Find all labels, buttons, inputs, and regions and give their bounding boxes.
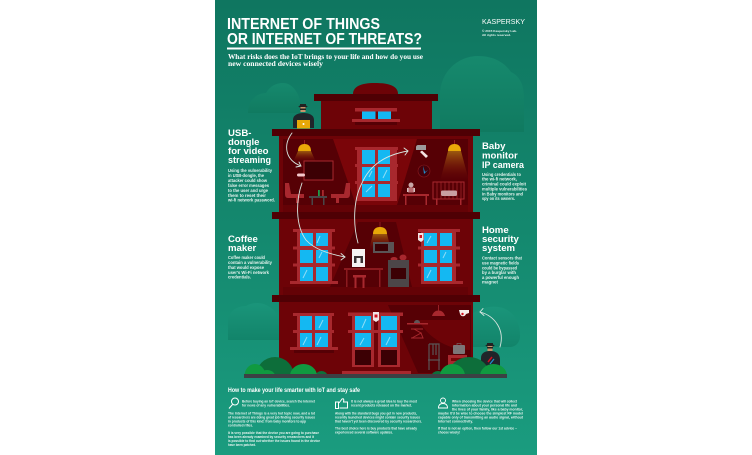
tip 2: experienced several software updates. [335,430,393,434]
logo: Kaspersky: © 2015 Kaspersky Lab. [482,30,517,33]
callout: home security: Home [482,225,509,236]
security camera [459,310,469,316]
callout: USB dongle: USB- [228,128,251,139]
callout: home security [482,225,523,284]
logo: Kaspersky: All rights reserved. [482,34,511,37]
cornice: middle [272,212,480,219]
callout: coffee maker: maker [228,243,257,254]
callout: coffee maker: user's Wi-Fi network [228,270,270,275]
callout: baby monitor: Baby [482,141,506,152]
tip 1: The Internet of Things is a very hot topic now, and a lot [228,412,316,416]
subtitle [228,54,423,68]
arrow: dongle to coffee maker [298,183,345,260]
tip 1 [228,398,320,447]
callout: home security: security [482,234,519,245]
callout: home security: magnet [482,280,499,284]
room: top floor [283,139,468,212]
ground [244,374,507,378]
tip 1: in products of this kind: from baby monitors to app [228,420,306,424]
hacker on the roof [293,104,314,128]
callout: home security: Contact sensors that [482,256,523,260]
callout: coffee maker: credentials. [228,274,251,280]
callout: USB dongle: attacker could show [228,178,268,183]
bushes: left [244,357,327,374]
title: INTERNET OF THINGS [227,16,380,33]
lamp: right [440,140,469,181]
callout: USB dongle: in USB-dongle, the [228,173,265,178]
stove [388,254,409,287]
tip 3: When choosing the device that will collect [452,400,518,404]
callout: baby monitor: spy on its owners. [482,196,515,201]
callout: home security: a powerful enough [482,275,519,280]
window: ground floor [290,313,338,353]
callout: baby monitor: IP camera [482,160,525,171]
tip 3: capable only of transmitting an audio signal, without [438,416,524,420]
tip 2: Along with the standard bugs you get in new products, [335,412,417,416]
room: kitchen [283,222,468,295]
tip 3: information about your personal life and [452,404,517,408]
icon: magnifier [229,398,238,408]
title: OR INTERNET OF THREATS? [227,31,422,48]
bottom heading: How to make your life smarter with IoT and stay safe [228,387,360,394]
wall clock [418,165,430,177]
coffee maker [352,249,365,267]
armchair: right [331,183,350,203]
callout: USB dongle [227,128,275,202]
callout: home security: by a burglar with [482,270,516,275]
building [272,83,480,375]
bushes: right [432,357,507,374]
callout: coffee maker: Coffee maker could [228,255,265,260]
tip 2: that haven't yet been discovered by security researchers. [335,420,422,424]
tip 2: It is not always a great idea to buy the most [351,400,418,404]
double doors [342,312,411,374]
coffee table [309,190,327,205]
callout: USB dongle: streaming [228,155,271,166]
counter and stool [344,268,383,288]
callout: coffee maker [228,234,273,280]
logo: Kaspersky [482,17,525,37]
hat and hanger [407,320,428,338]
icon: person [438,398,448,408]
logo: Kaspersky: KASPERSKY [482,17,525,26]
callout: coffee maker: Coffee [228,234,258,245]
icon: thumbs up [336,399,348,408]
callout: USB dongle: them to reset their [228,193,266,198]
window: top floor [355,147,398,201]
chair [428,344,440,370]
room: garage [388,305,471,373]
callout: coffee maker: contain a vulnerability [228,260,273,265]
dresser and suitcase [448,344,467,372]
arrow: hacker to TV [287,133,301,167]
panel: poster background [215,0,537,455]
callout: USB dongle: Using the vulnerability [228,168,273,173]
lamp: kitchen [369,222,391,250]
tip 3: Internet connectivity. [438,420,473,424]
callout: baby monitor: criminal could exploit [482,182,527,186]
tip 1: is possible to find out whether the issues found in the device [228,439,320,443]
tip 1: have been patched. [228,443,256,447]
tip 1: has been already examined by security researchers and it [228,435,315,439]
window: middle right [418,229,463,284]
callout: baby monitor [482,141,528,201]
tip 2 [335,399,422,434]
callout: home security: use magnetic fields [482,260,520,266]
crib [433,182,464,205]
microwave [373,242,394,253]
toy robot and table [403,182,429,205]
tip 3: maybe it'd be wise to choose the simplest RF model [438,412,523,416]
tip 3: choose wisely! [438,430,460,434]
callout: USB dongle: dongle [228,137,259,148]
tip 1: for news of any vulnerabilities. [242,404,290,408]
callout: USB dongle: for video [228,146,269,157]
roof structure [314,83,438,131]
tip 3 [438,398,524,434]
tip 1: It is very possible that the device you are going to purchase [228,431,319,435]
tip 1: controlled rifles. [228,424,253,428]
tip 2: recently launched devices might contain security issues [335,416,420,420]
tip 1: of researchers are doing great job finding security issues [228,416,315,420]
tip 3: If that is not an option, then follow our 1st advice – [438,426,517,430]
lamp: left [293,140,316,162]
callout: home security: could be bypassed [482,266,517,270]
door sensor: kitchen [418,233,424,242]
arrow: burglar to sensor [480,308,501,347]
tip 1: Before buying an IoT device, search the Internet [242,400,316,404]
walls [279,135,473,375]
TV [304,161,333,180]
callout: home security: system [482,243,515,254]
callout: USB dongle: wi-fi network password. [227,198,275,202]
tip 2: recent products released on the market. [351,404,412,408]
callout: baby monitor: in Baby monitors and [482,192,523,196]
IP camera [416,145,428,158]
door sensor: ground floor [373,312,379,322]
cornice: lower [272,295,480,302]
USB dongle [297,174,305,176]
callout: baby monitor: the wi-fi network, [482,176,517,182]
garage lamp [432,305,445,316]
callout: baby monitor: multiple vulnerabilities [482,186,528,192]
window: middle left [290,229,338,284]
cornice: upper [272,129,480,136]
arrow: coffee maker to camera [355,148,408,243]
callout: USB dongle: false error messages [228,183,270,188]
tip 3: the lives of your family, like a baby monitor, [452,408,523,412]
callout: USB dongle: to the user and urge [228,188,269,193]
subtitle: new connected devices wisely [228,61,324,68]
armchair: left [285,183,304,203]
callout: baby monitor: monitor [482,150,518,162]
title [227,16,422,50]
burglar with magnet [481,343,500,366]
subtitle: What risks does the IoT brings to your life and how do you use [228,54,423,61]
tip 2: The best choice here is buy products that have already [335,426,417,430]
callout: baby monitor: Using credentials to [482,172,521,177]
callout: coffee maker: that would expose [228,265,265,270]
clouds behind the building [228,56,524,347]
